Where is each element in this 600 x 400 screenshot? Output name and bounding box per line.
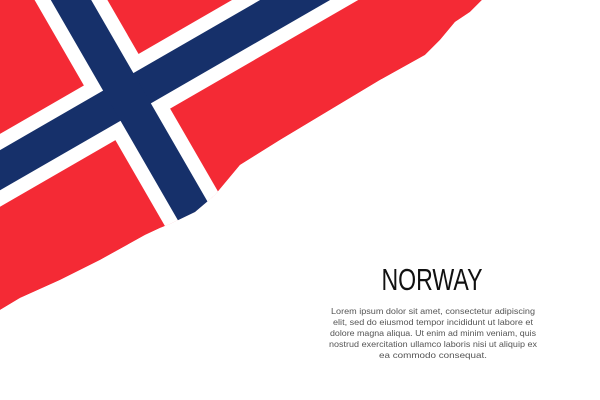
body text: elit, sed do eiusmod tempor incididunt ut labore et: [333, 317, 534, 327]
blue cross: [0, 0, 330, 240]
body text: nostrud exercitation ullamco laboris nisi ut aliquip ex: [329, 339, 538, 349]
body text: dolore magna aliqua. Ut enim ad minim veniam, quis: [330, 328, 536, 338]
body text: ea commodo consequat.: [379, 350, 487, 360]
title: NORWAY: [382, 262, 482, 297]
body text: [329, 306, 538, 360]
flag brush stroke: [0, 0, 482, 310]
white cross: [0, 0, 358, 240]
body text: Lorem ipsum dolor sit amet, consectetur adipiscing: [331, 306, 535, 316]
